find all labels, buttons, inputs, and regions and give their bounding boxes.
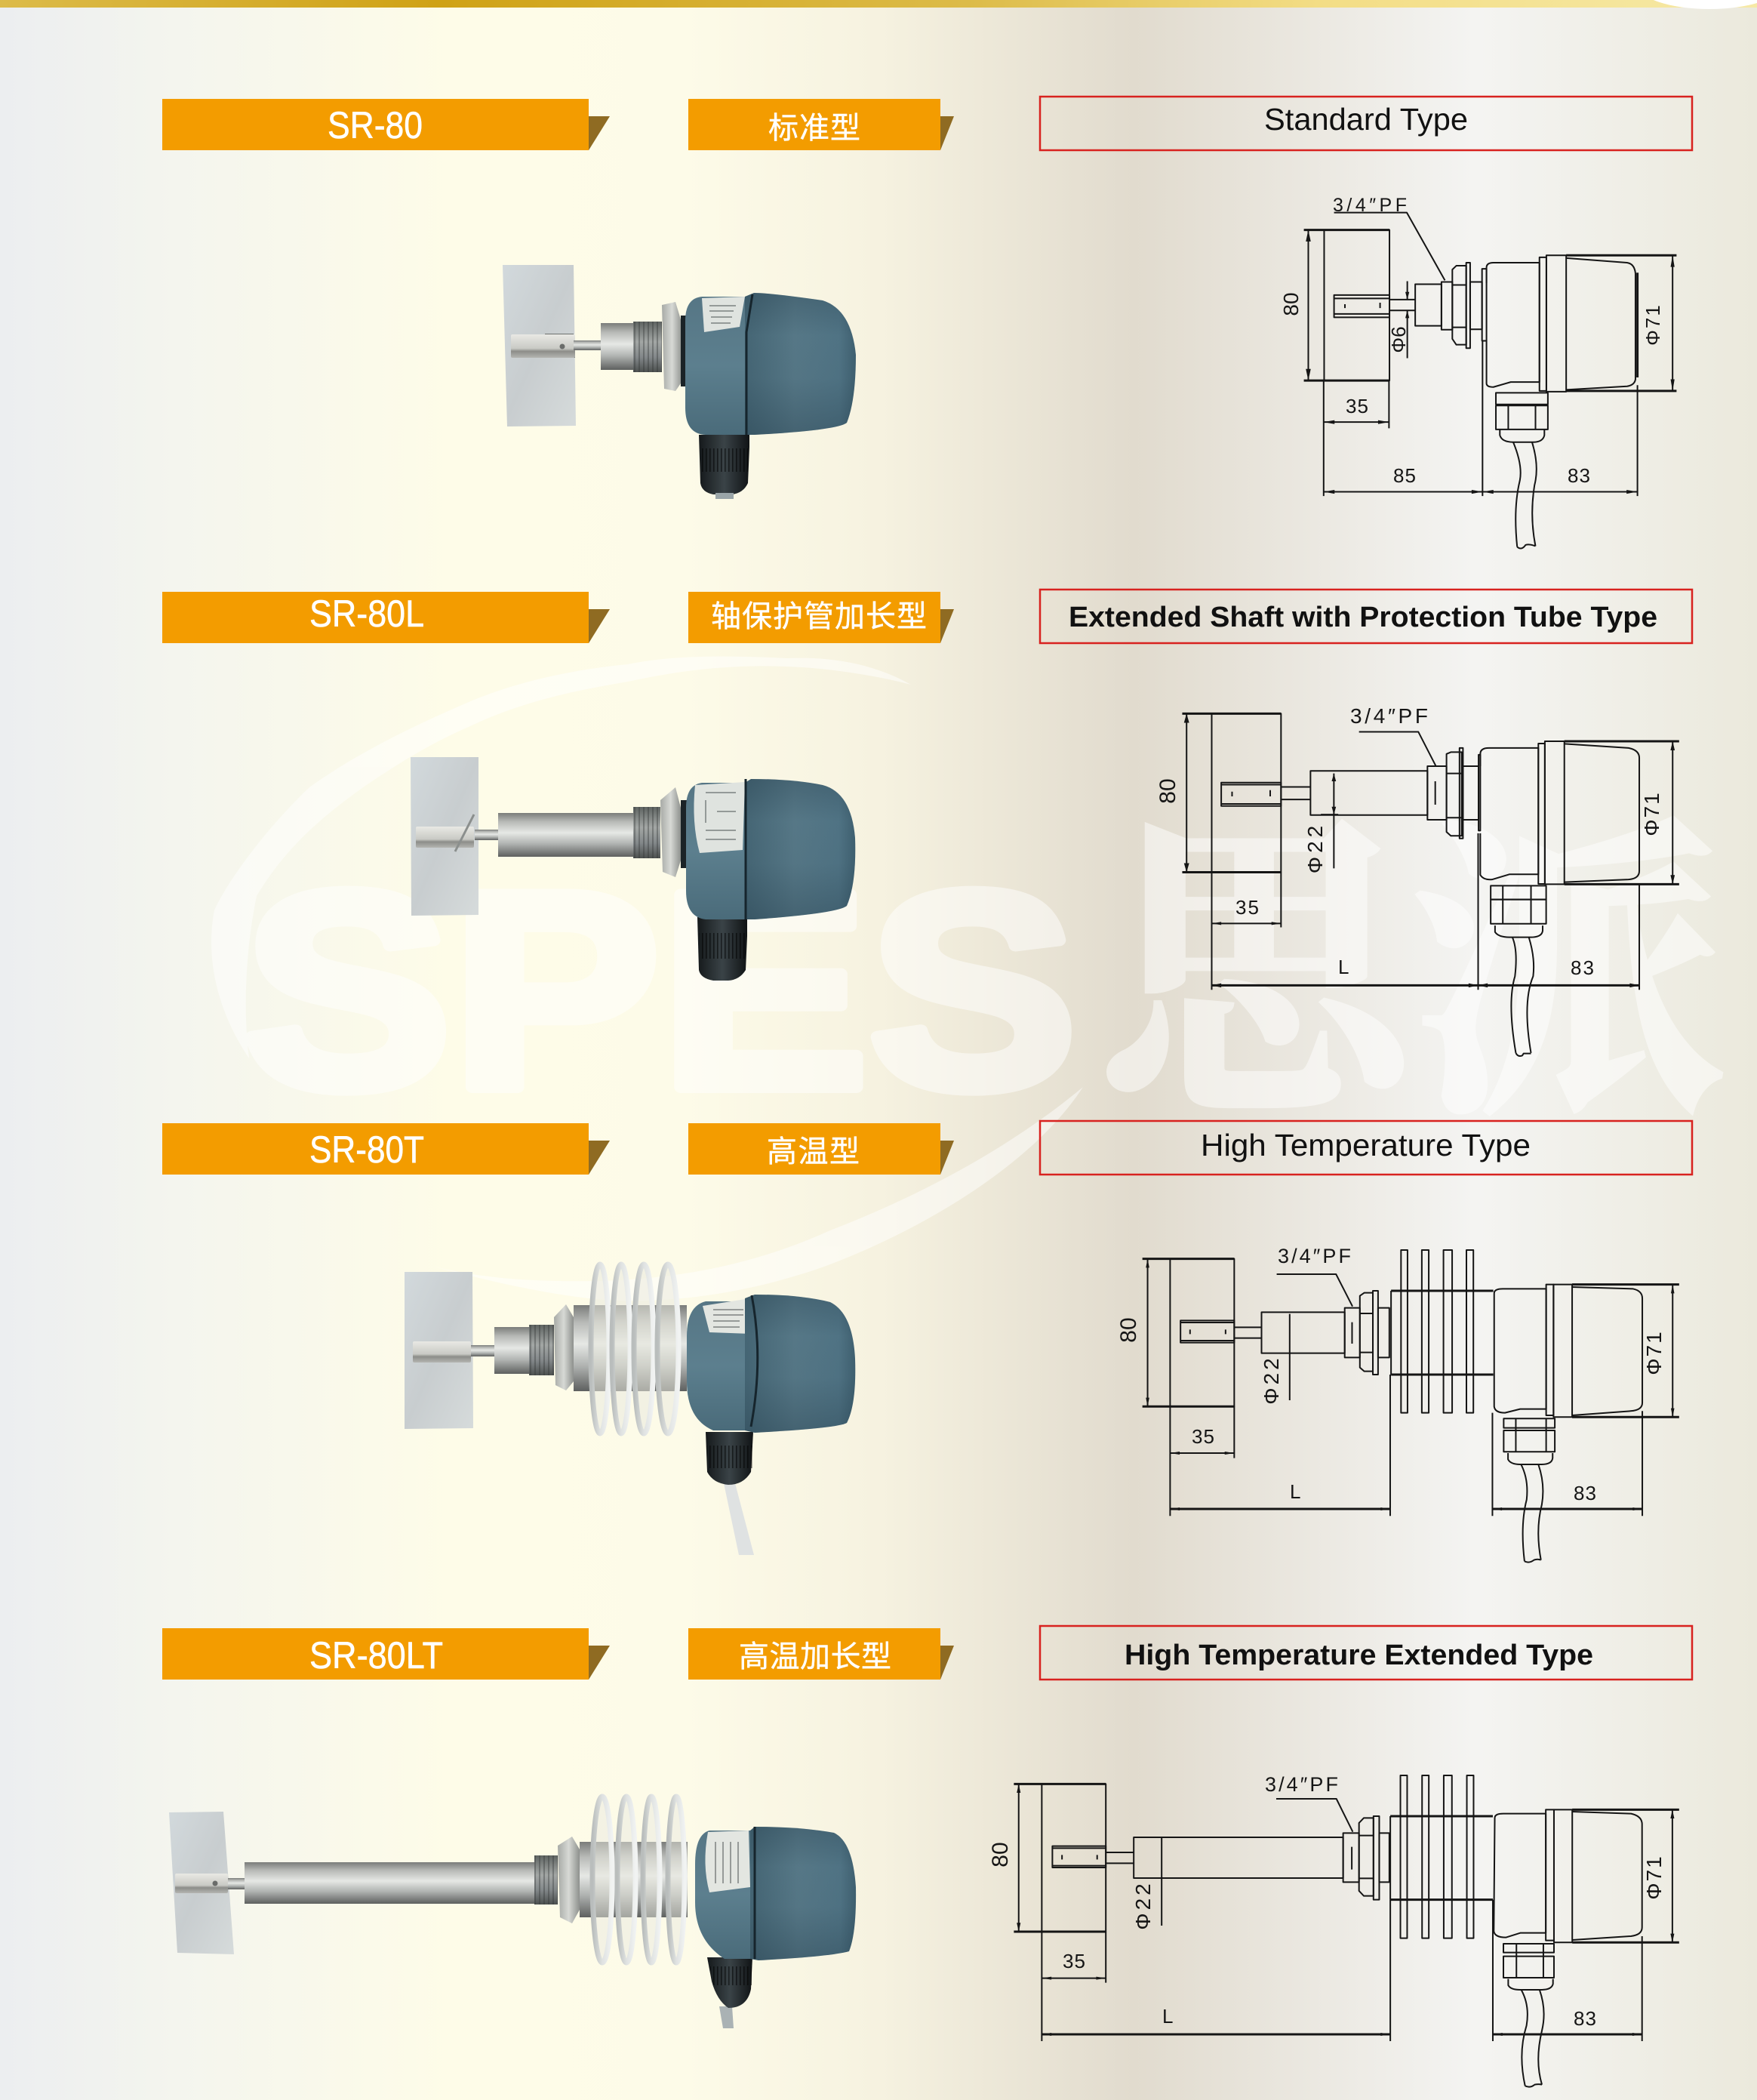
english title box High Temperature Type <box>1040 1121 1692 1175</box>
row 2 header <box>162 590 1692 643</box>
drawing linework <box>1304 213 1676 549</box>
dimension labels: Φ22 <box>1260 1355 1283 1405</box>
watermark swoosh lower <box>425 1087 1083 1301</box>
dimension labels: 80 <box>1279 292 1303 316</box>
technical drawing SR-80L <box>1155 704 1679 1056</box>
watermark swoosh upper <box>211 657 911 1058</box>
dimension labels: 83 <box>1571 956 1594 979</box>
dimension labels: 3/4″PF <box>1333 195 1407 216</box>
dimension labels: 35 <box>1192 1425 1214 1448</box>
model bar SR-80L: SR-80L <box>309 593 424 635</box>
dimension labels <box>1116 1245 1666 1504</box>
english title box High Temperature Extended: High Temperature Extended Type <box>1125 1640 1593 1671</box>
dimension labels: 80 <box>1116 1317 1141 1343</box>
english title box Standard Type: Standard Type <box>1264 102 1468 137</box>
type bar 标准型 <box>688 99 954 150</box>
model bar SR-80L <box>162 592 610 643</box>
dimension labels: 85 <box>1393 464 1416 487</box>
drawing linework <box>1182 713 1679 1056</box>
technical drawing SR-80T <box>1116 1245 1679 1563</box>
dimension labels: L <box>1338 956 1349 978</box>
drawing linework <box>1143 1250 1679 1563</box>
model bar SR-80T <box>162 1123 610 1175</box>
type bar 轴保护管加长型: 轴保护管加长型 <box>711 600 927 633</box>
watermark SPES letters: SPES <box>243 835 1077 1147</box>
row 3 header <box>162 1121 1692 1175</box>
dimension labels: L <box>1290 1480 1300 1503</box>
dimension labels: Φ71 <box>1642 303 1664 346</box>
dimension labels: 80 <box>988 1842 1013 1868</box>
model bar SR-80LT <box>162 1628 610 1680</box>
dimension labels: Φ71 <box>1640 791 1663 836</box>
dimension labels: 3/4″PF <box>1278 1245 1351 1267</box>
dimension labels <box>988 1773 1666 2030</box>
dimension labels: Φ71 <box>1642 1330 1666 1375</box>
watermark Chinese brand: 思派 <box>1098 805 1725 1152</box>
english title box High Temperature Type: High Temperature Type <box>1201 1128 1531 1162</box>
english title box Extended Shaft: Extended Shaft with Protection Tube Type <box>1069 602 1657 633</box>
dimension labels: 83 <box>1574 1482 1596 1504</box>
type bar 标准型: 标准型 <box>768 112 860 145</box>
top gold band <box>0 0 1757 8</box>
row 4 header <box>162 1626 1692 1680</box>
type bar 轴保护管加长型 <box>688 592 954 643</box>
product photo SR-80 <box>503 265 856 499</box>
watermark: SPES logo <box>211 657 1725 1301</box>
english title box High Temperature Extended <box>1040 1626 1692 1680</box>
dimension labels <box>1279 195 1664 487</box>
product photo SR-80T <box>405 1264 855 1555</box>
dimension labels: Φ71 <box>1642 1855 1666 1900</box>
dimension labels <box>1155 704 1663 979</box>
dimension labels: 3/4″PF <box>1350 704 1428 728</box>
top right white ellipse <box>1638 0 1757 9</box>
model bar SR-80: SR-80 <box>328 104 423 146</box>
product photo SR-80L <box>411 757 855 981</box>
type bar 高温加长型: 高温加长型 <box>739 1640 891 1674</box>
type bar 高温型 <box>688 1123 954 1175</box>
row 1 header <box>162 97 1692 150</box>
type bar 高温型: 高温型 <box>767 1135 860 1169</box>
model bar SR-80LT: SR-80LT <box>309 1634 443 1677</box>
dimension labels: 35 <box>1235 896 1259 919</box>
dimension labels: 3/4″PF <box>1265 1773 1338 1796</box>
dimension labels: 80 <box>1155 778 1180 804</box>
english title box Standard Type <box>1040 97 1692 150</box>
model bar SR-80 <box>162 99 610 150</box>
dimension labels: 83 <box>1574 2007 1596 2030</box>
english title box Extended Shaft <box>1040 590 1692 643</box>
dimension labels: 35 <box>1063 1950 1085 1972</box>
drawing linework <box>1014 1775 1679 2087</box>
type bar 高温加长型 <box>688 1628 954 1680</box>
model bar SR-80T: SR-80T <box>309 1129 424 1171</box>
dimension labels: 83 <box>1568 464 1590 487</box>
dimension labels: Φ6 <box>1387 326 1410 353</box>
dimension labels: 35 <box>1346 395 1368 417</box>
technical drawing SR-80 <box>1279 195 1676 549</box>
product photo SR-80LT <box>169 1797 856 2028</box>
dimension labels: Φ22 <box>1131 1880 1155 1930</box>
dimension labels: Φ22 <box>1303 822 1327 873</box>
technical drawing SR-80LT <box>988 1773 1679 2087</box>
dimension labels: L <box>1162 2005 1173 2028</box>
